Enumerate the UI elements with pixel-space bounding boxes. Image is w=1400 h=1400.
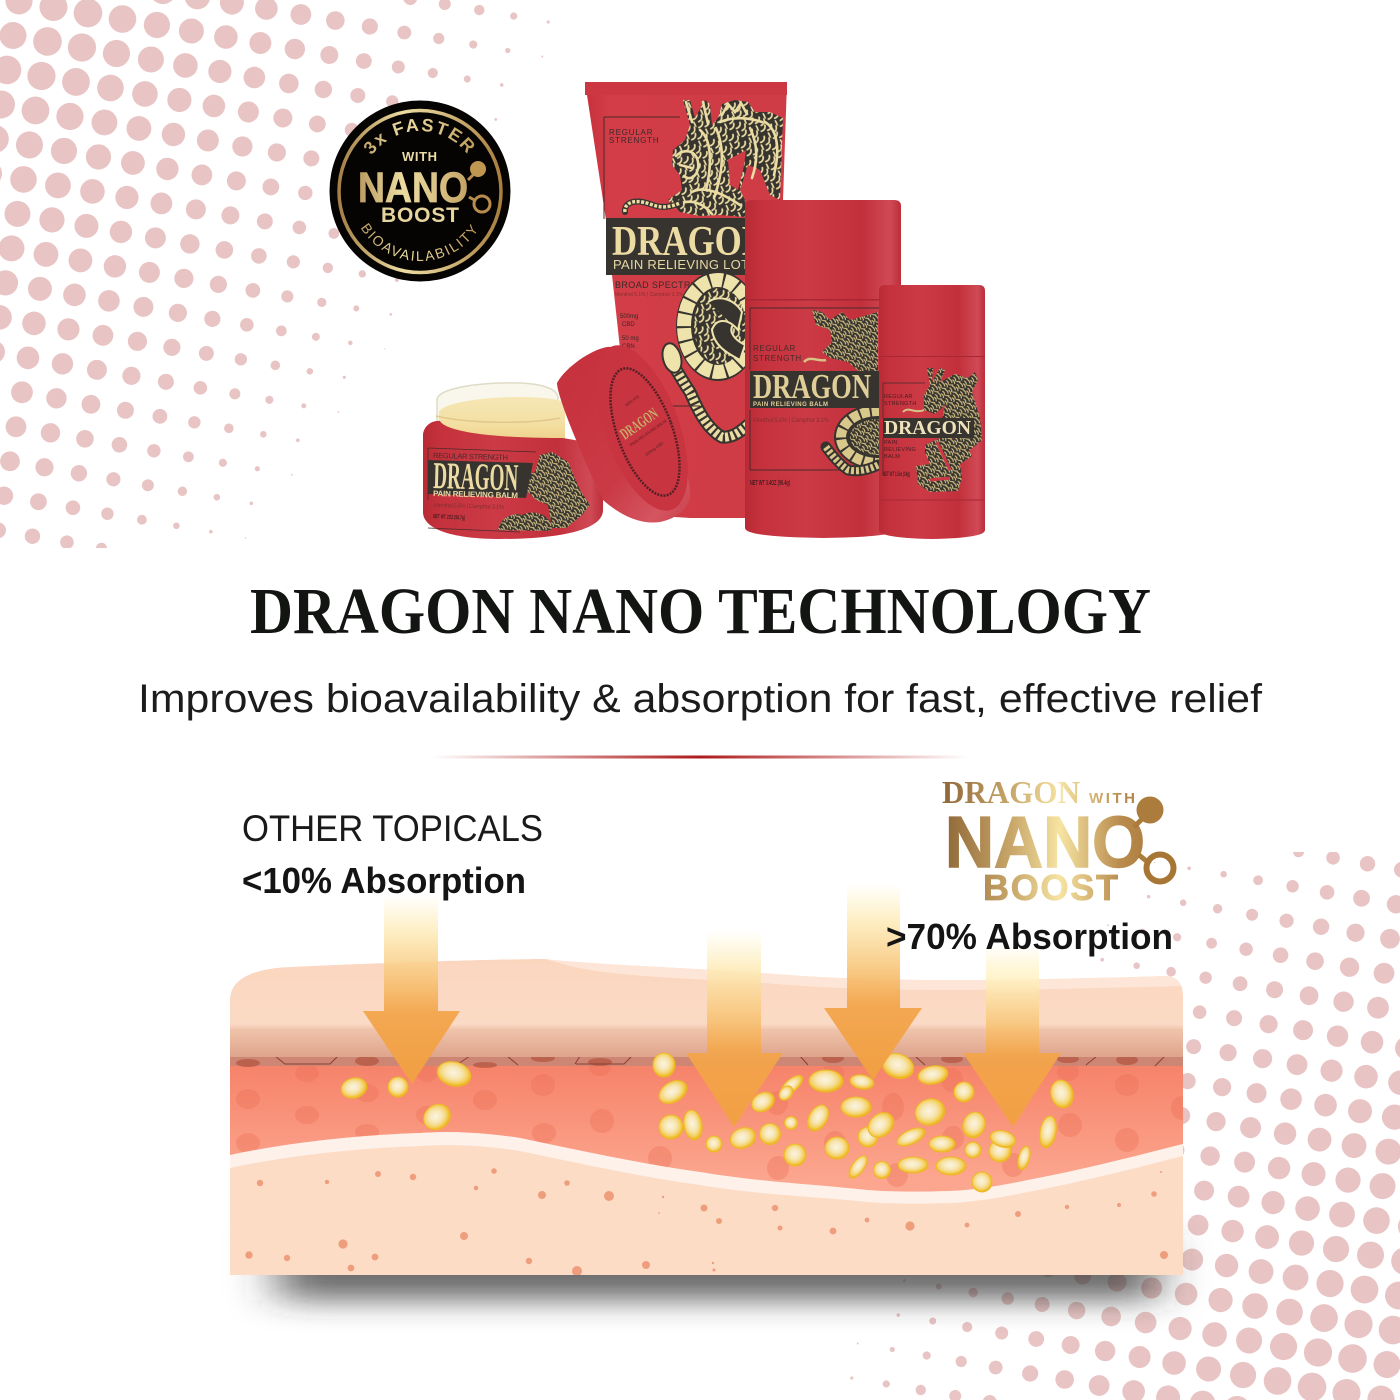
product: jar lid leaning on tube: 100mg CBD xyxy=(644,440,665,457)
product: open balm jar: PAIN RELIEVING BALM xyxy=(433,489,518,500)
product: large balm stick xyxy=(745,200,922,538)
badge arc text top: 3x FASTER xyxy=(364,118,474,154)
logo: dragon with nano boost xyxy=(942,775,1174,908)
logo: nano: NANO xyxy=(945,803,1145,883)
product: tube of pain relieving lotion: STRENGTH xyxy=(609,136,659,145)
product: tube of pain relieving lotion: CBN xyxy=(622,344,635,350)
label: other topicals: OTHER TOPICALS xyxy=(242,808,543,849)
product: tube of pain relieving lotion xyxy=(585,82,787,518)
skin: white boundary line xyxy=(230,1132,1183,1204)
skin: honeycomb band xyxy=(230,1057,1183,1068)
product: small balm stick: DRAGON xyxy=(884,417,972,439)
product: tube of pain relieving lotion: 50 mg xyxy=(622,336,639,342)
product: tube of pain relieving lotion: PAIN RELIEVING LOTION xyxy=(613,257,773,272)
logo: dragon: DRAGON xyxy=(942,775,1080,810)
product: tube of pain relieving lotion: BROAD SPECTRUM xyxy=(615,280,706,290)
product: open balm jar: REGULAR STRENGTH xyxy=(433,451,508,462)
logo: boost: BOOST xyxy=(983,867,1118,908)
skin: top epidermis layer xyxy=(230,959,1183,1057)
badge arc text bottom: BIOAVAILABILITY xyxy=(361,223,476,261)
arrow 4 xyxy=(963,945,1061,1127)
divider xyxy=(432,756,968,758)
arrow 2 xyxy=(686,930,783,1127)
stat: less than 10 percent absorption: <10% Absorption xyxy=(242,860,526,901)
product: small balm stick: STRENGTH xyxy=(884,401,917,407)
product: large balm stick: STRENGTH xyxy=(753,354,802,363)
skin cross-section diagram xyxy=(230,959,1193,1276)
badge: boost: BOOST xyxy=(381,204,459,227)
product: large balm stick: REGULAR xyxy=(753,344,796,353)
arrow 3 xyxy=(824,883,922,1080)
product: small balm stick xyxy=(879,285,985,539)
product: small balm stick: PAIN xyxy=(884,440,898,446)
halftone dots: bottom-right corner xyxy=(849,784,1400,1400)
badge: nano: NANO xyxy=(358,164,468,212)
product: jar lid leaning on tube: DRAGON xyxy=(617,405,662,443)
skin: dermis dots xyxy=(245,1168,1168,1276)
product: large balm stick: NET WT 3.4OZ (96.4g) xyxy=(750,480,790,487)
product: tube of pain relieving lotion: Menthol 5.1% | Camphor 3.1% xyxy=(615,292,684,298)
product group xyxy=(423,82,985,539)
badge: with: WITH xyxy=(402,149,437,164)
product: tube of pain relieving lotion: CBD xyxy=(622,322,635,328)
arrow 1: other topicals xyxy=(363,895,460,1084)
product: large balm stick: DRAGON xyxy=(753,367,871,406)
title: DRAGON NANO TECHNOLOGY xyxy=(250,575,1151,648)
skin: lower dermis layer xyxy=(230,1120,1183,1275)
product: small balm stick: NET WT 1.5oz (14g) xyxy=(883,472,910,478)
skin: red layer cell spots xyxy=(236,1060,1193,1187)
product: tube of pain relieving lotion: DRAGON xyxy=(612,219,767,265)
product: jar lid leaning on tube xyxy=(557,334,707,523)
product: large balm stick: Menthol 5.1% | Camphor 3.1% xyxy=(753,418,830,424)
badge: 3x faster with nano boost xyxy=(330,100,510,282)
halftone dots: top-left corner xyxy=(0,0,551,616)
product: jar lid leaning on tube: ISOLATE xyxy=(624,394,641,408)
product: jar lid leaning on tube: PAIN RELIEVING BALM xyxy=(629,418,667,447)
badge: molecule icon xyxy=(468,161,490,212)
product: large balm stick: PAIN RELIEVING BALM xyxy=(753,402,828,408)
nanoparticle droplets xyxy=(339,1049,1076,1192)
product: tube of pain relieving lotion: 500mg xyxy=(620,314,638,320)
product: open balm jar xyxy=(423,383,603,539)
logo: with: WITH xyxy=(1089,790,1135,807)
product: tube of pain relieving lotion: REGULAR xyxy=(609,128,653,137)
product: small balm stick: RELIEVING xyxy=(884,447,916,453)
product: open balm jar: NET WT 2OZ (56.7g) xyxy=(433,514,465,522)
stat: greater than 70 percent absorption: >70% Absorption xyxy=(886,916,1173,957)
product: small balm stick: REGULAR xyxy=(884,394,913,400)
product: open balm jar: Menthol 5.5% | Camphor 3.1% xyxy=(434,503,505,511)
skin: top layer highlight xyxy=(545,959,1183,990)
product: small balm stick: BALM xyxy=(884,454,900,460)
skin: red layer xyxy=(230,1060,1183,1192)
logo: molecule icon xyxy=(1134,796,1174,882)
drop shadow below skin xyxy=(278,1235,1158,1300)
product: open balm jar: DRAGON xyxy=(433,455,519,499)
subtitle: Improves bioavailability & absorption for fast, effective relief xyxy=(138,677,1263,721)
